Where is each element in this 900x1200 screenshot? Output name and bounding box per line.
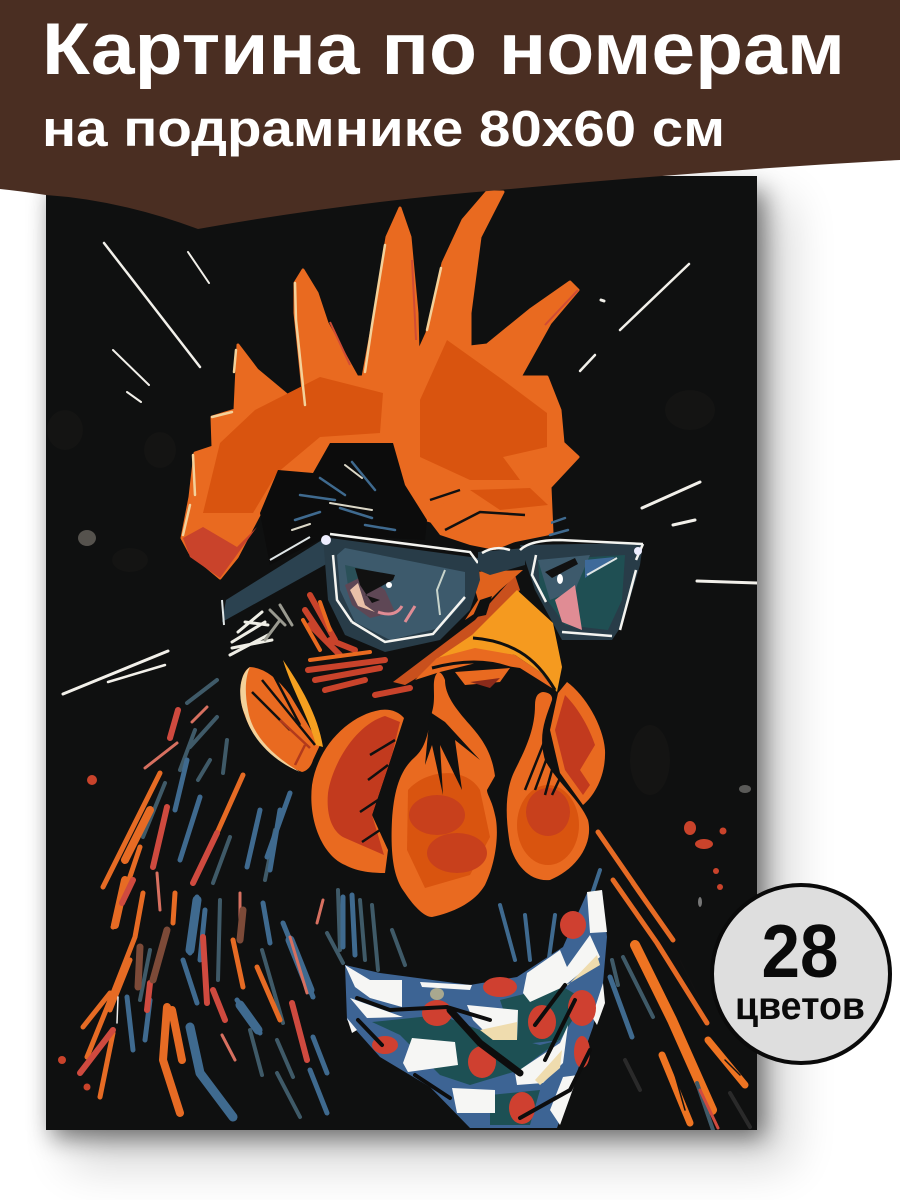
bandana: [345, 890, 607, 1128]
ear feathers: [230, 605, 292, 655]
bandana folds: [357, 985, 590, 1118]
face: [303, 570, 523, 695]
badge number: 28: [762, 909, 838, 993]
forehead: [430, 522, 552, 550]
badge caption: цветов: [735, 985, 865, 1028]
right wattle rear: [550, 682, 605, 805]
sunglasses: [222, 534, 643, 652]
right side feathers: [598, 832, 707, 1023]
head feathers: [260, 443, 570, 536]
beak: [415, 590, 562, 692]
title: Картина по номерам: [42, 9, 845, 90]
bandana white blocks: [345, 890, 607, 1125]
badge: 28 colours: [712, 885, 890, 1063]
painting: rooster on canvas: [46, 176, 757, 1130]
spark lines: [63, 243, 757, 694]
middle wattle: [392, 672, 497, 917]
comb: [182, 192, 578, 578]
wattles: [311, 672, 605, 917]
neck feathers: [80, 680, 750, 1130]
bandana red dots: [372, 911, 596, 1124]
right lens: [520, 543, 643, 640]
header banner: [0, 0, 900, 229]
nostril band: [393, 575, 520, 685]
left lens: [323, 537, 480, 652]
comb deep shading: [203, 340, 547, 513]
background splatter: [58, 530, 751, 1090]
canvas drop shadow: [52, 190, 790, 1165]
ear lobe: [240, 660, 323, 772]
subtitle: на подрамнике 80х60 см: [42, 100, 725, 157]
bandana teal patches: [372, 985, 585, 1125]
streaked cheek: [303, 595, 410, 695]
bandana cream patches: [480, 955, 600, 1085]
bridge: [478, 548, 525, 575]
comb cream edges: [183, 245, 441, 535]
temple arm: [222, 540, 330, 622]
left wattle: [311, 710, 404, 873]
right wattle front: [507, 692, 589, 880]
